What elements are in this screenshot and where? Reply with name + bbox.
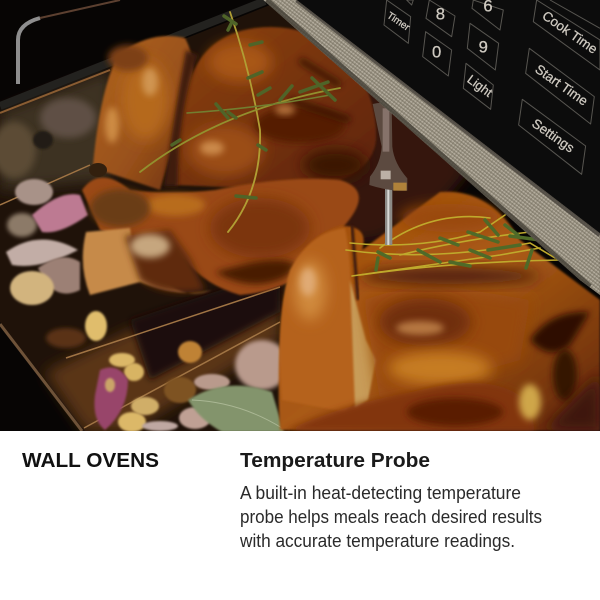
icon: thyme sprig on chicken one bbox=[140, 12, 340, 232]
tray ribs bbox=[0, 165, 280, 428]
keypad labels: 9 bbox=[479, 38, 488, 57]
oven rack handle bbox=[18, 0, 120, 84]
photo: roast chickens in wall oven bbox=[0, 0, 600, 432]
description text: with accurate temperature readings. bbox=[239, 530, 515, 551]
vegetables left of tray bbox=[0, 98, 289, 432]
breast bbox=[175, 27, 376, 190]
keypad labels: Start Time bbox=[532, 61, 591, 109]
keypad labels: 0 bbox=[432, 43, 441, 62]
heading: feature title: Temperature Probe bbox=[240, 450, 430, 472]
chicken one bbox=[82, 27, 470, 295]
keypad labels: Cook Time bbox=[539, 8, 600, 57]
lower drumstick bbox=[83, 228, 212, 295]
door gasket strip bbox=[260, 0, 600, 300]
leg bbox=[93, 36, 193, 190]
keypad buttons bbox=[384, 0, 600, 174]
heading: category: WALL OVENS bbox=[22, 450, 159, 472]
wing bbox=[280, 228, 358, 412]
keypad labels bbox=[385, 0, 600, 156]
oven tray interior bbox=[0, 1, 300, 431]
keypad labels: Settings bbox=[529, 116, 578, 156]
chicken two bbox=[279, 192, 600, 431]
temperature probe bbox=[369, 103, 407, 245]
keypad labels: 8 bbox=[436, 4, 445, 23]
icon: sage leaf bbox=[188, 386, 284, 432]
keypad labels: Timer bbox=[385, 10, 412, 34]
keypad labels: Light bbox=[464, 72, 495, 100]
thigh bbox=[82, 178, 359, 295]
icon: thyme sprigs on chicken two bbox=[346, 215, 560, 276]
description text bbox=[239, 482, 542, 551]
description text: probe helps meals reach desired results bbox=[240, 506, 542, 527]
oven door control panel bbox=[260, 0, 600, 300]
description text: A built-in heat-detecting temperature bbox=[240, 482, 521, 503]
